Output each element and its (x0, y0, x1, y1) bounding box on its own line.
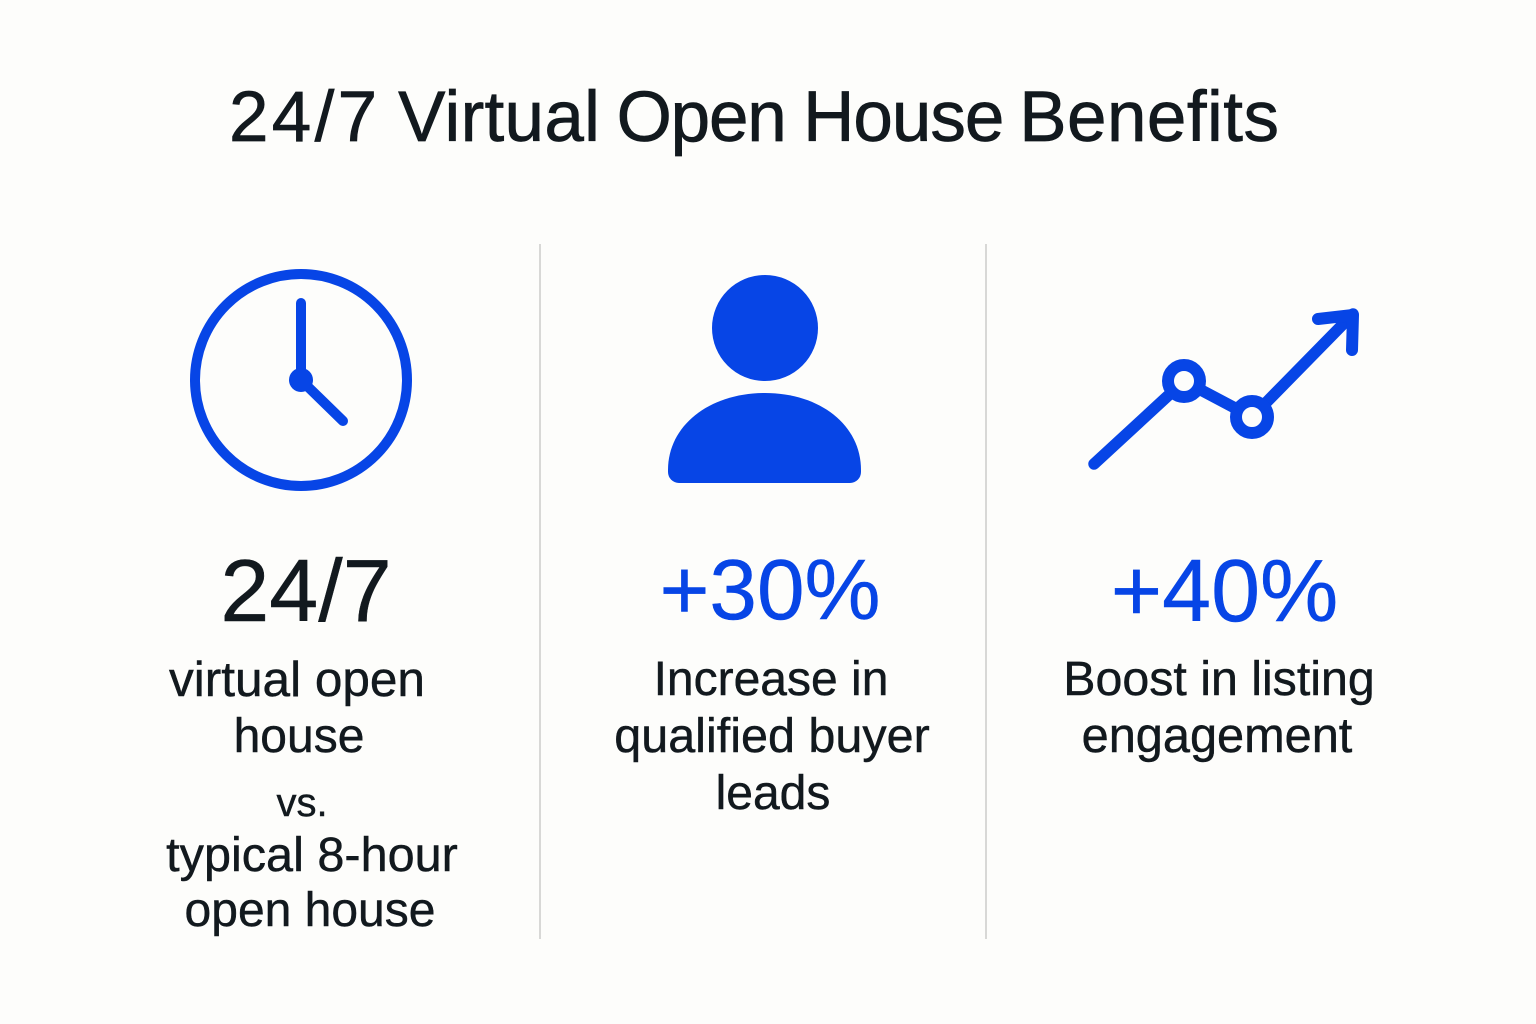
description: boost in listing engagement: Boost in listing (1063, 652, 1375, 706)
description: increase in qualified buyer leads: Increase in (654, 653, 888, 706)
description: increase in qualified buyer leads: qualified buyer (614, 709, 930, 763)
stat: +40%: +40% (1111, 541, 1338, 640)
description: increase in qualified buyer leads: leads (716, 767, 830, 820)
description: virtual open house (168, 652, 425, 763)
panel: 24/7 availability (166, 269, 458, 936)
description: typical 8-hour open house: open house (185, 884, 435, 936)
description: boost in listing engagement (1063, 652, 1375, 763)
icon: person (668, 275, 861, 483)
description: boost in listing engagement: engagement (1082, 709, 1352, 763)
description: typical 8-hour open house: typical 8-hour (166, 828, 458, 882)
stat: +30%: +30% (659, 543, 881, 638)
description: virtual open house: virtual open (169, 652, 425, 707)
text: vs.: vs. (276, 781, 328, 825)
description: virtual open house: house (234, 710, 364, 763)
description: increase in qualified buyer leads (614, 653, 930, 820)
icon: rising line chart (1088, 308, 1359, 470)
icon: clock (190, 269, 412, 491)
panel: listing engagement (1063, 308, 1375, 763)
panel: qualified buyer leads (614, 275, 930, 820)
stat: 24/7: 24/7 (220, 541, 392, 640)
description: typical 8-hour open house (166, 828, 458, 936)
title: 24/7 Virtual Open House Benefits (229, 78, 1279, 157)
